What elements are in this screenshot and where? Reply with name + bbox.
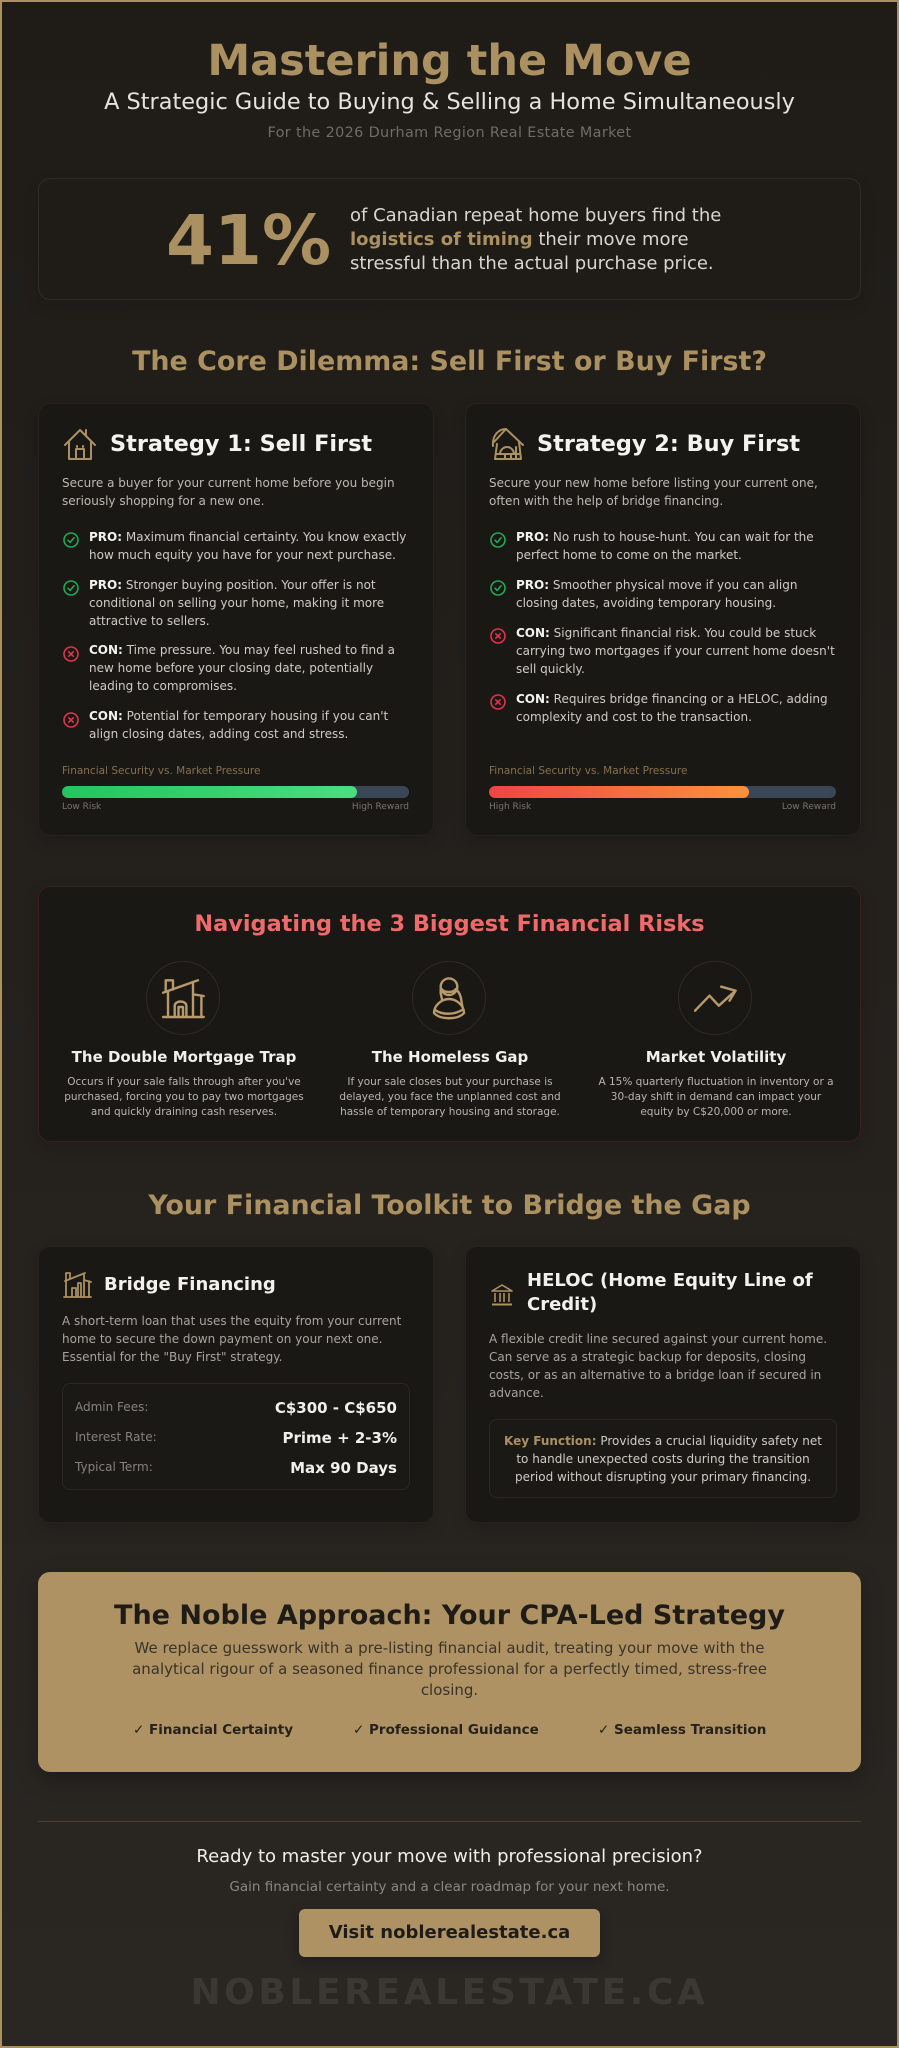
- pro item 1: PRO: No rush to house-hunt. You can wait for the: [516, 530, 814, 544]
- pro item 1: PRO: Maximum financial certainty. You know exactly: [89, 530, 406, 544]
- risk title 3: Market Volatility: [646, 1048, 786, 1066]
- interest rate value: Prime + 2-3%: [283, 1428, 397, 1446]
- key function text: to handle unexpected costs during the transition: [516, 1452, 810, 1466]
- subtitle: A Strategic Guide to Buying & Selling a Home Simultaneously: [104, 89, 795, 115]
- bridge financing description: [62, 1314, 402, 1364]
- con item 2: [490, 692, 828, 724]
- strategy 1 description: [62, 476, 395, 508]
- big number: 41%: 41%: [166, 201, 331, 281]
- icon: house: [64, 429, 96, 460]
- con item 2: CON: Requires bridge financing or a HELOC, adding: [516, 692, 828, 706]
- strategy 2 heading: Strategy 2: Buy First: [537, 431, 800, 457]
- pro item 2: [63, 578, 384, 628]
- con item 1: carrying two mortgages if your current home doesn't: [516, 644, 835, 658]
- meter label: Financial Security vs. Market Pressure: [489, 765, 687, 777]
- interest rate label: Interest Rate:: [75, 1430, 157, 1444]
- con item 1: CON: Significant financial risk. You could be stuck: [516, 626, 816, 640]
- panel: key statistic: [38, 178, 861, 300]
- bridge financing title: Bridge Financing: [104, 1274, 276, 1295]
- heading: financial toolkit: Your Financial Toolkit to Bridge the Gap: [148, 1190, 751, 1221]
- heloc description: costs, or as an alternative to a bridge loan if secured in: [489, 1368, 821, 1382]
- icon: house with arch: [492, 428, 524, 460]
- strategy 1 description: seriously shopping for a new one.: [62, 494, 264, 508]
- risk text 3: 30-day shift in demand can impact your: [611, 1090, 821, 1102]
- risk text 3: equity by C$20,000 or more.: [640, 1106, 792, 1118]
- con item 1: CON: Time pressure. You may feel rushed to find a: [89, 643, 395, 657]
- con item 1: sell quickly.: [516, 662, 585, 676]
- heloc title: [527, 1270, 813, 1315]
- key function text: period without disrupting your primary financing.: [515, 1470, 811, 1484]
- strategy 2 description: [489, 476, 818, 508]
- bridge financing description: A short-term loan that uses the equity from your current: [62, 1314, 401, 1328]
- panel: bridge financing: [38, 1246, 434, 1523]
- heloc description: A flexible credit line secured against your current home.: [489, 1332, 827, 1346]
- meter end labels: [489, 802, 836, 812]
- risk title 1: The Double Mortgage Trap: [72, 1048, 296, 1066]
- typical term value: Max 90 Days: [290, 1458, 397, 1476]
- pro item 1: how much equity you have for your next purchase.: [89, 548, 396, 562]
- heloc description: Can serve as a strategic backup for deposits, closing: [489, 1350, 806, 1364]
- heloc title: Credit): [527, 1294, 597, 1315]
- noble description: analytical rigour of a seasoned finance professional for a perfectly timed, stress-free: [132, 1660, 767, 1678]
- pro item 2: attractive to sellers.: [89, 614, 210, 628]
- pro item 1: [490, 530, 814, 562]
- button: visit website: [299, 1909, 600, 1957]
- icon: homeless gap figure: [412, 961, 486, 1035]
- tagline: For the 2026 Durham Region Real Estate Market: [267, 125, 632, 141]
- strategy 2 description: often with the help of bridge financing.: [489, 494, 723, 508]
- panel: financial risks: [38, 886, 861, 1142]
- risk text 1: [64, 1076, 304, 1118]
- pro item 1: [63, 530, 406, 562]
- meter end labels: Low Risk: [62, 802, 101, 812]
- heloc description: [489, 1332, 827, 1400]
- panel: heloc: [465, 1246, 861, 1523]
- noble description: [132, 1638, 767, 1698]
- icon: bridge building: [63, 1272, 92, 1298]
- pro item 2: PRO: Smoother physical move if you can align: [516, 578, 797, 592]
- key function text: Key Function: Provides a crucial liquidity safety net: [504, 1434, 822, 1448]
- con item 2: complexity and cost to the transaction.: [516, 710, 752, 724]
- con item 1: leading to compromises.: [89, 679, 237, 693]
- meter bar: high risk: [489, 786, 836, 798]
- heloc title: HELOC (Home Equity Line of: [527, 1270, 813, 1291]
- meter bar: low risk: [62, 786, 409, 798]
- noble heading: The Noble Approach: Your CPA-Led Strategy: [114, 1600, 785, 1631]
- key function callout: [489, 1419, 837, 1498]
- bridge financing description: Essential for the "Buy First" strategy.: [62, 1350, 282, 1364]
- heloc description: advance.: [489, 1386, 544, 1400]
- con item 1: new home before your closing date, potentially: [89, 661, 373, 675]
- pro item 2: conditional on selling your home, making it more: [89, 596, 384, 610]
- icon: bank: [491, 1284, 513, 1306]
- title: Mastering the Move: [207, 36, 692, 86]
- risk text 2: [339, 1076, 561, 1118]
- key function text: [504, 1434, 822, 1484]
- risk text 2: delayed, you face the unplanned cost and: [339, 1090, 561, 1102]
- call to action subtext: Gain financial certainty and a clear roadmap for your next home.: [229, 1879, 670, 1895]
- admin fees value: C$300 - C$650: [275, 1398, 397, 1416]
- meter end labels: Low Reward: [782, 802, 836, 812]
- benefit 2: ✓ Professional Guidance: [353, 1722, 539, 1738]
- meter end labels: High Risk: [489, 802, 531, 812]
- con item 2: CON: Potential for temporary housing if you can't: [89, 709, 388, 723]
- admin fees label: Admin Fees:: [75, 1400, 148, 1414]
- risk text 1: and quickly draining cash reserves.: [91, 1106, 277, 1118]
- panel: strategy 1 sell first: [38, 403, 434, 836]
- risk text 3: A 15% quarterly fluctuation in inventory or a: [598, 1076, 834, 1088]
- statistic text: logistics of timing their move more: [350, 229, 689, 250]
- pro item 2: PRO: Stronger buying position. Your offer is not: [89, 578, 376, 592]
- heading: core dilemma: The Core Dilemma: Sell First or Buy First?: [132, 346, 767, 377]
- con item 1: [490, 626, 835, 676]
- panel: noble approach: [38, 1572, 861, 1772]
- risk text 1: Occurs if your sale falls through after you've: [67, 1076, 301, 1088]
- benefit 1: ✓ Financial Certainty: [133, 1722, 293, 1738]
- strategy 1 description: Secure a buyer for your current home before you begin: [62, 476, 395, 490]
- noble description: We replace guesswork with a pre-listing financial audit, treating your move with the: [134, 1638, 764, 1656]
- statistic text: stressful than the actual purchase price.: [350, 253, 714, 274]
- noble description: closing.: [421, 1680, 478, 1698]
- risk text 2: hassle of temporary housing and storage.: [340, 1106, 560, 1118]
- icon: market trend arrow: [678, 961, 752, 1035]
- con item 2: [63, 709, 388, 741]
- call to action heading: Ready to master your move with professional precision?: [196, 1846, 703, 1867]
- risk text 1: purchased, forcing you to pay two mortgages: [64, 1090, 304, 1102]
- risk title 2: The Homeless Gap: [372, 1048, 528, 1066]
- typical term label: Typical Term:: [75, 1460, 153, 1474]
- watermark: NOBLEREALESTATE.CA: [190, 1972, 709, 2013]
- risk text 2: If your sale closes but your purchase is: [347, 1076, 553, 1088]
- risks heading: Navigating the 3 Biggest Financial Risks: [194, 911, 705, 937]
- statistic text: [350, 205, 721, 274]
- icon: double mortgage house: [146, 961, 220, 1035]
- bridge financing details table: [62, 1383, 410, 1490]
- strategy 1 heading: Strategy 1: Sell First: [110, 431, 372, 457]
- strategy 2 description: Secure your new home before listing your current one,: [489, 476, 818, 490]
- pro item 1: perfect home to come on the market.: [516, 548, 742, 562]
- pro item 2: closing dates, avoiding temporary housing.: [516, 596, 776, 610]
- benefit 3: ✓ Seamless Transition: [598, 1722, 766, 1738]
- con item 1: [63, 643, 395, 693]
- bridge financing description: home to secure the down payment on your next one.: [62, 1332, 382, 1346]
- statistic text: of Canadian repeat home buyers find the: [350, 205, 721, 226]
- meter end labels: [62, 802, 409, 812]
- panel: strategy 2 buy first: [465, 403, 861, 836]
- button: visit website: Visit noblerealestate.ca: [329, 1922, 570, 1943]
- risk text 3: [598, 1076, 834, 1118]
- pro item 2: [490, 578, 797, 610]
- meter label: Financial Security vs. Market Pressure: [62, 765, 260, 777]
- meter end labels: High Reward: [352, 802, 409, 812]
- con item 2: align closing dates, adding cost and stress.: [89, 727, 348, 741]
